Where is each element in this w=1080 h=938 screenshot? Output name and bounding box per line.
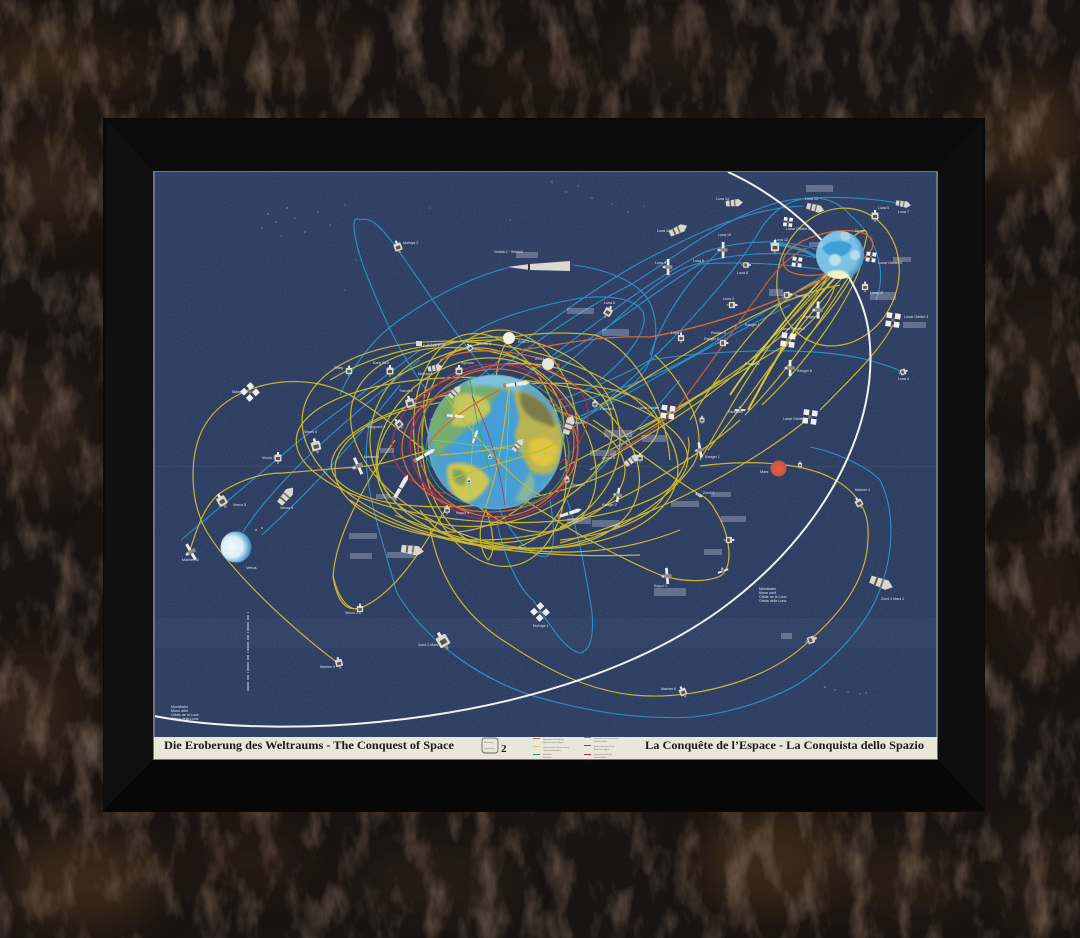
spacecraft on the left side, toward Venus: Venus 4 [280,506,293,510]
spacecraft on the left side, toward Venus: Mariner 9 [320,665,335,669]
publisher logo and number: Weltraum [484,741,493,744]
spacecraft around Earth: Lunar Orbiter 3 [638,406,662,410]
spacecraft on the left side, toward Venus: Zond 2 Mars 1 [418,643,441,647]
spacecraft near the Moon: Luna 8 [737,271,748,275]
spacecraft around Earth: Luna 8 [604,301,615,305]
spacecraft around Earth: Echo 2 [518,340,529,344]
spacecraft around Earth [334,239,720,559]
orbit key caption: Orbita della Luna [759,599,786,603]
spacecraft around Earth: Molniya 2 [403,241,418,245]
spacecraft near the Moon: Ranger 3 [728,410,743,414]
bottom-left caption: Orbita della Luna [171,717,198,721]
spacecraft on the left side, toward Venus: Venus 5 [233,503,246,507]
spacecraft around Earth: Transit 1 [399,389,413,393]
spacecraft around Earth: Explorer 1 [423,344,439,348]
rocket: Vostok [507,261,570,271]
spacecraft near the Moon: Luna 13 [805,197,818,201]
spacecraft on the left side, toward Venus: Venus 3 [345,611,358,615]
spacecraft around Earth: Early Bird [373,361,389,365]
planet: Mars: Mars [760,470,769,474]
spacecraft around Earth: Gemini 8 [600,407,614,411]
spacecraft near the Moon: Luna 12 [775,238,788,242]
legend with coloured lines: Soviet probes [594,740,608,743]
bottom-left caption: Moon orbit [171,709,188,713]
spacecraft near the Moon: Ranger 2 [745,362,760,366]
legend with coloured lines: Unbemannte Raumsonden [543,746,570,749]
spacecraft near the Moon: Lunar Orbiter 3 [878,261,902,265]
spacecraft on the left side, toward Venus: Venus 7 [262,456,275,460]
spacecraft near the Moon: Luna 14 [716,197,729,201]
spacecraft on the right side, toward Mars [654,461,904,699]
spacecraft near the Moon: Luna 2 [671,331,682,335]
spacecraft near the Moon: Lunar Orbiter 5 [786,227,810,231]
yellow orbit paths around Earth [190,310,868,696]
spacecraft on the left side, toward Venus: Molniya 1 [533,624,548,628]
spacecraft near the Moon: Lunar Orbiter 1 [783,417,807,421]
spacecraft on the right side, toward Mars: Mariner 6 [661,687,676,691]
legend with coloured lines: Soviet flights [594,756,607,759]
spacecraft near the Moon: Luna 6 [693,259,704,263]
legend with coloured lines: Manned space flights [543,741,565,744]
spacecraft near the Moon: Luna 9 [655,261,666,265]
spacecraft near the Moon: Ranger 9 [795,294,810,298]
orbit key caption: Orbite de la Lune [759,595,787,599]
orbit lines over Earth [428,378,561,508]
orbit key caption: Mondbahn [759,587,776,591]
spacecraft on the right side, toward Mars: Zond 1 [703,491,714,495]
spacecraft near the Moon: Luna 10 [718,233,731,237]
legend with coloured lines: Satelliten [543,753,553,756]
spacecraft around Earth: Gemini 10 [570,421,586,425]
spacecraft near the Moon: Ranger 4 [711,331,726,335]
legend with coloured lines: Sowjetische Flüge [594,753,613,756]
spacecraft around Earth: Soyuz 4 [456,511,469,515]
dashed vertical marker [248,612,249,691]
spacecraft on the left side, toward Venus: Venus 6 [304,430,317,434]
spacecraft near the Moon: Ranger 5 [704,337,719,341]
poster panel [153,171,938,760]
spacecraft on the left side, toward Venus: Mariner 2 [232,390,247,394]
yellow transfer lines to the Moon [560,191,918,543]
spacecraft near the Moon: Luna 3 [723,297,734,301]
legend with coloured lines: Bemannte Raumflüge [543,738,565,741]
bottom-left caption [171,705,199,721]
blue orbit paths [181,197,902,718]
spacecraft on the left side, toward Venus: Mariner 5 [364,455,379,459]
spacecraft near the Moon: Ranger 6 [797,369,812,373]
spacecraft around Earth: ATS 1 [535,357,545,361]
planet: Venus [220,532,257,570]
spacecraft near the Moon: Luna 5 [878,206,889,210]
planet: Moon: Mond [855,229,864,233]
spacecraft near the Moon: Lunar Orbiter 4 [904,315,928,319]
planet: Mars [760,460,786,476]
spacecraft near the Moon: Luna 16 [870,291,883,295]
planet: Earth [428,374,563,509]
title strip [154,737,937,759]
spacecraft near the Moon: Luna 15 [657,229,670,233]
spacecraft on the right side, toward Mars: Zond 3 Mars 2 [881,597,904,601]
spacecraft near the Moon: Luna 4 [898,377,909,381]
legend with coloured lines: Unmanned probes [543,749,562,752]
publisher logo and number: Sammlung [484,748,495,750]
spacecraft on the left side, toward Venus: Mariner 10 [182,558,199,562]
orbit key caption: Moon orbit [759,591,776,595]
legend with coloured lines: American flights [594,748,610,751]
spacecraft near the Moon: Ranger 7 [803,315,818,319]
legend with coloured lines: Sowjetische Raumsonden [594,737,620,740]
title: German and English: Die Eroberung des Weltraums - The Conquest of Space [164,738,455,752]
spacecraft around Earth: Relay [334,366,343,370]
spacecraft near the Moon: Lunar Orbiter 2 [781,327,805,331]
spacecraft near the Moon [655,185,928,425]
publisher logo and number: 2 [501,743,507,755]
spacecraft around Earth: Soyuz 1 [572,483,585,487]
publisher logo and number [482,738,507,755]
legend with coloured lines: Satellites [543,756,553,759]
spacecraft on the right side, toward Mars: Soyuz 1 [654,584,667,588]
bottom-left caption: Orbite de la Lune [171,713,199,717]
red and orange orbit paths [377,222,877,530]
spacecraft around Earth: Sputnik 3 [476,342,491,346]
planet: Moon [816,229,864,282]
title: French and Italian: La Conquête de l’Espace - La Conquista dello Spazio [645,738,924,752]
orbit key caption [759,587,787,603]
bottom-left caption: Mondbahn [171,705,188,709]
spacecraft around Earth: Vostok 1 · Wostok [494,250,523,254]
spacecraft around Earth: Ranger 1 [705,455,720,459]
planet: Venus: Venus [246,566,257,570]
spacecraft near the Moon: Ranger 1 [745,323,760,327]
spacecraft around Earth: Vanguard 1 [367,425,385,429]
spacecraft around Earth: A-1 Asterix [427,343,445,347]
legend with coloured lines: Amerikanische Flüge [594,745,615,748]
legend with coloured lines [533,737,620,759]
spacecraft around Earth: Ranger 2 [602,503,617,507]
black picture frame [103,118,985,812]
star field [261,181,867,695]
white lunar transfer curve [154,172,870,727]
spacecraft around Earth: Apollo 8 [602,456,615,460]
spacecraft around Earth: Syncom [461,361,474,365]
spacecraft around Earth: Molniya [418,372,430,376]
spacecraft near the Moon: Luna 7 [898,210,909,214]
spacecraft on the right side, toward Mars: Mariner 4 [855,488,870,492]
spacecraft on the left side, toward Venus [181,381,551,670]
